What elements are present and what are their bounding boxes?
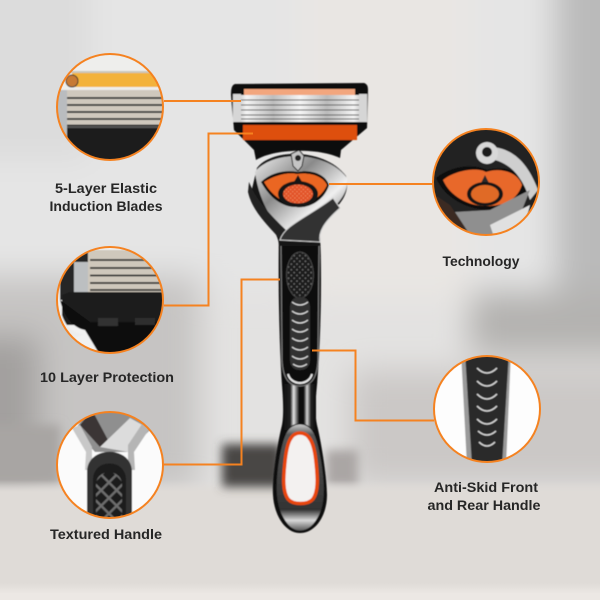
label: blades	[50, 180, 163, 214]
razor neck and pivot	[248, 150, 347, 246]
label: anti-skid handle: and Rear Handle	[428, 497, 541, 513]
grip frame	[281, 238, 319, 386]
callout: protection	[55, 245, 165, 355]
callout: technology	[430, 125, 542, 240]
callout: blades	[55, 52, 165, 162]
connector lines	[164, 101, 434, 464]
label: textured handle: Textured Handle	[50, 526, 162, 542]
callout: textured handle	[55, 410, 165, 520]
grip ridges	[290, 297, 310, 370]
razor handle	[273, 236, 327, 533]
grip texture	[286, 252, 314, 298]
label: blades: 5-Layer Elastic	[55, 180, 157, 196]
label: technology: Technology	[442, 253, 520, 269]
handle base	[276, 424, 324, 531]
razor cartridge	[231, 83, 368, 160]
callout: anti-skid handle	[433, 355, 541, 463]
label: anti-skid handle	[428, 479, 541, 513]
label: protection: 10 Layer Protection	[40, 369, 174, 385]
orange guard strip	[243, 125, 357, 140]
label: blades: Induction Blades	[50, 198, 163, 214]
razor	[231, 83, 368, 533]
label: anti-skid handle: Anti-Skid Front	[434, 479, 538, 495]
